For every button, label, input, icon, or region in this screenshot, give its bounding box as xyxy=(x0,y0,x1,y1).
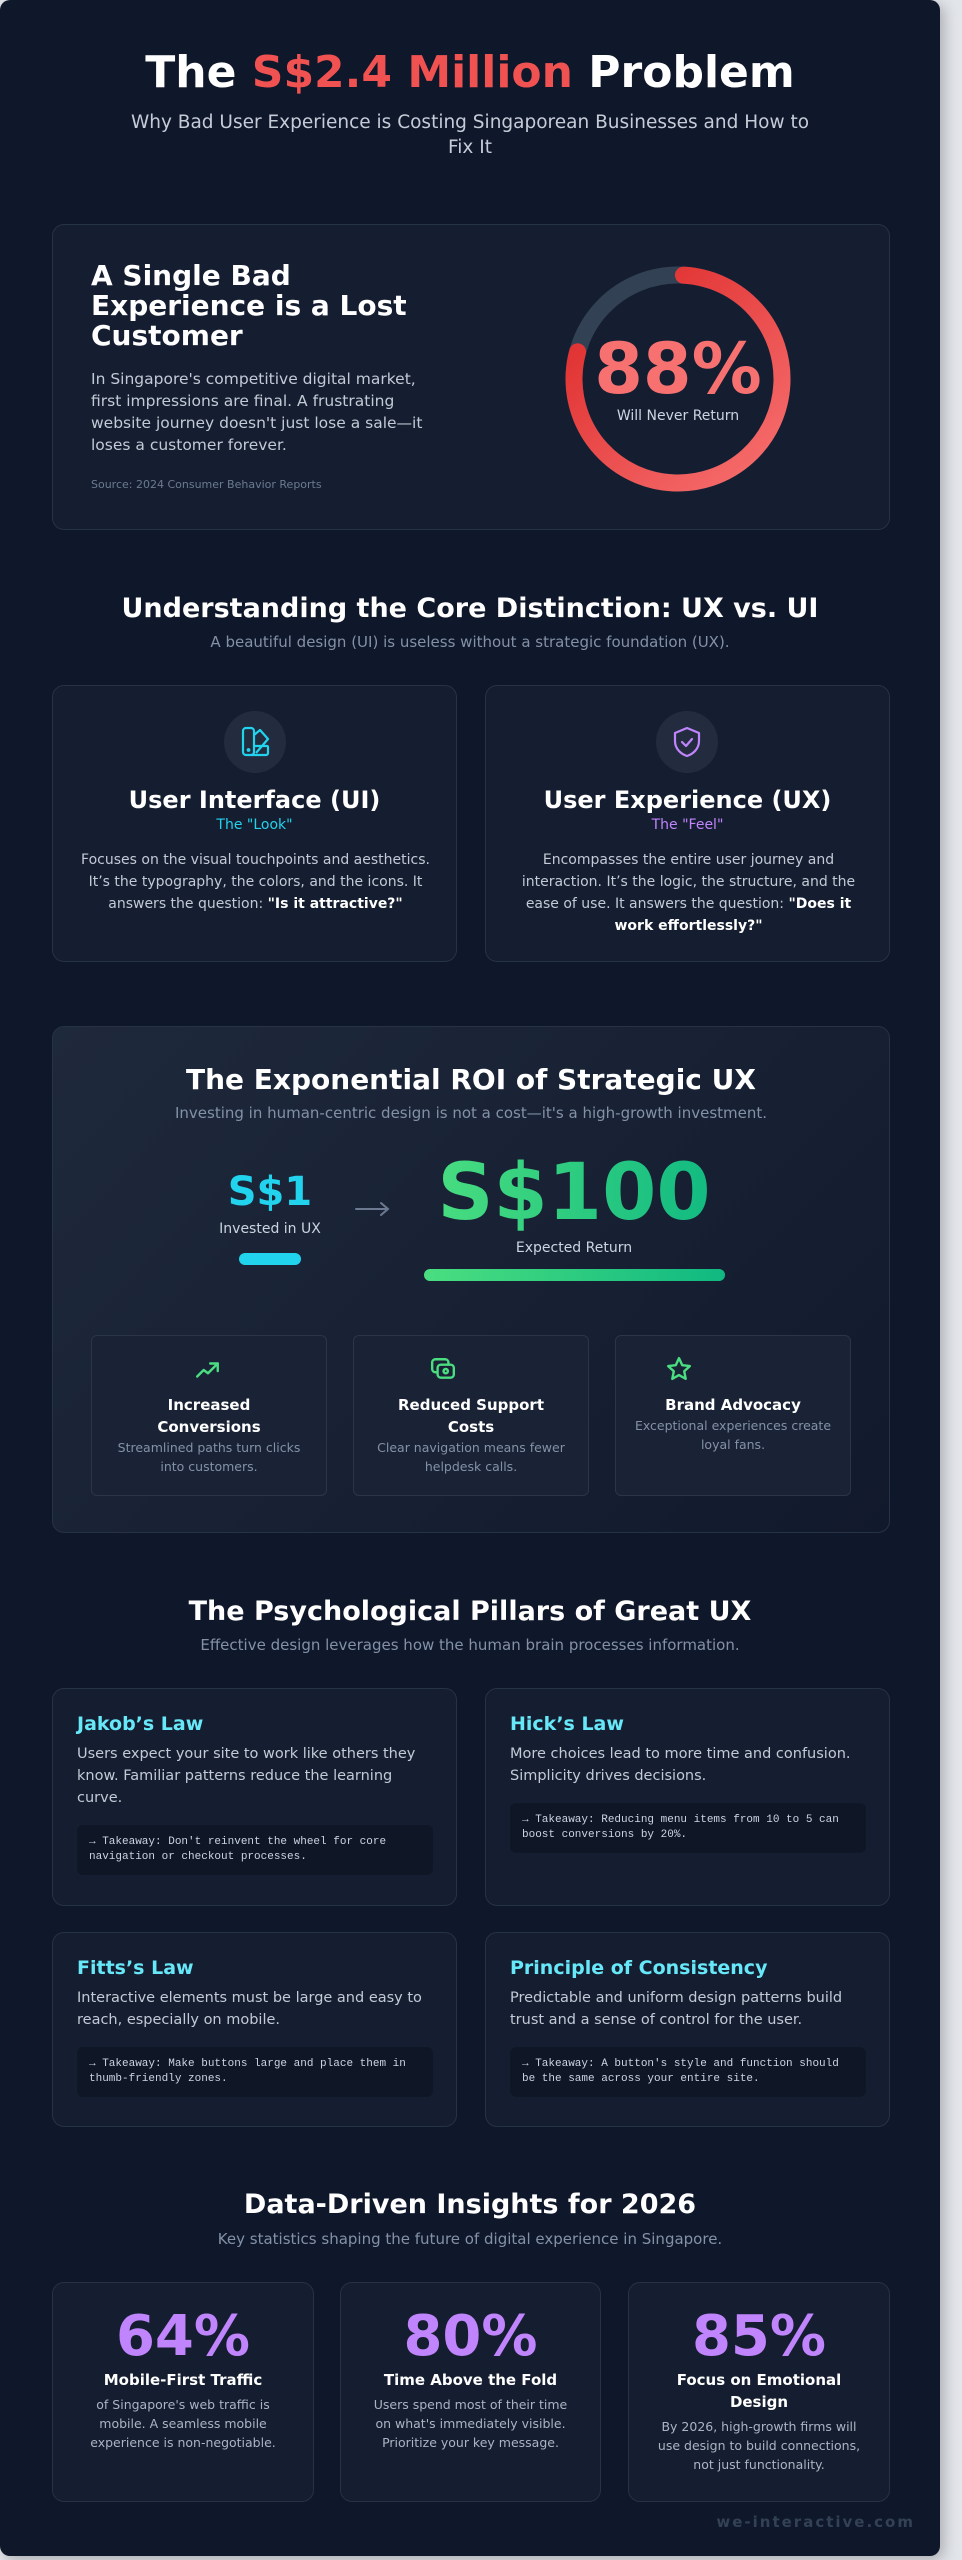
card: consistency: Predictable and uniform design patterns build trust and a sense of control for the user. xyxy=(510,1990,842,2028)
icon: trend xyxy=(196,1362,219,1378)
donut chart: 88% xyxy=(566,266,790,492)
subheading: A beautiful design (UI) is useless without a strategic foundation (UX). xyxy=(210,633,730,651)
paragraph: In Singapore's competitive digital market, first impressions are final. A frustrating website journey doesn't just lose a sale—it loses a customer forever. xyxy=(91,370,422,454)
subtitle: Why Bad User Experience is Costing Singaporean Businesses and How to Fix It xyxy=(131,112,809,158)
heading: data insights: Data-Driven Insights for 2026 xyxy=(244,2189,696,2220)
icon: shield xyxy=(656,711,718,773)
panel: lost customer xyxy=(52,224,890,530)
benefit: support: Reduced Support Costs xyxy=(398,1396,544,1436)
title: The S$2.4 Million Problem xyxy=(145,47,795,98)
heading: ROI: The Exponential ROI of Strategic UX xyxy=(186,1063,756,1096)
stat card: 64%: of Singapore's web traffic is mobile. A seamless mobile experience is non-negotiable. xyxy=(90,2397,276,2450)
stat: S$1: Invested in UX xyxy=(219,1221,321,1237)
takeaway: → Takeaway: Reducing menu items from 10 to 5 can boost conversions by 20%. xyxy=(522,1814,839,1841)
heading: single bad experience: A Single Bad Experience is a Lost Customer xyxy=(91,259,407,352)
takeaway: → Takeaway: Don't reinvent the wheel for core navigation or checkout processes. xyxy=(89,1836,386,1863)
benefit: support: Clear navigation means fewer helpdesk calls. xyxy=(377,1440,565,1474)
title: UX: User Experience (UX) xyxy=(544,786,831,814)
source: Source: 2024 Consumer Behavior Reports xyxy=(91,478,322,491)
body text: Focuses on the visual touchpoints and aesthetics. It’s the typography, the colors, and the icons. It answers the question: "Is it attractive?" xyxy=(81,852,430,912)
card: Jakob's law: Users expect your site to work like others they know. Familiar patterns reduce the learning curve. xyxy=(77,1746,415,1806)
benefit: advocacy: Brand Advocacy xyxy=(665,1396,801,1414)
donut chart: 88%: Will Never Return xyxy=(617,408,739,424)
stat card: 85% xyxy=(628,2282,890,2502)
stat: S$100: S$100 xyxy=(437,1148,711,1238)
card: Hick's law: More choices lead to more time and confusion. Simplicity drives decisions. xyxy=(510,1746,850,1784)
stat card: 80% xyxy=(340,2282,601,2502)
stat card: 80%: 80% xyxy=(403,2304,538,2369)
card: Fitts's law xyxy=(52,1932,457,2127)
takeaway xyxy=(510,2047,866,2097)
benefit: advocacy: Exceptional experiences create loyal fans. xyxy=(635,1418,831,1452)
card: Jakob's law: Jakob’s Law xyxy=(77,1713,203,1735)
benefit: advocacy xyxy=(615,1335,851,1496)
subheading: Key statistics shaping the future of digital experience in Singapore. xyxy=(218,2230,722,2248)
takeaway xyxy=(510,1803,866,1853)
heading: psychological pillars: The Psychological Pillars of Great UX xyxy=(189,1596,751,1627)
stat card: 85%: By 2026, high-growth firms will use design to build connections, not just functionality. xyxy=(658,2419,860,2472)
takeaway xyxy=(77,2047,433,2097)
stat card: 80%: Users spend most of their time on what's immediately visible. Prioritize your key message. xyxy=(374,2397,567,2450)
card: Fitts's law: Interactive elements must be large and easy to reach, especially on mobile. xyxy=(77,1990,422,2028)
benefit: conversions xyxy=(91,1335,327,1496)
benefit: support xyxy=(353,1335,589,1496)
stat: S$100: Expected Return xyxy=(516,1240,632,1256)
takeaway: → Takeaway: Make buttons large and place them in thumb-friendly zones. xyxy=(89,2058,406,2085)
tagline: The "Feel" xyxy=(652,817,723,833)
stat: S$100 xyxy=(424,1148,725,1281)
heading: UX vs UI: Understanding the Core Distinction: UX vs. UI xyxy=(122,593,818,624)
title: UI: User Interface (UI) xyxy=(129,786,380,814)
footer: brand: we-interactive.com xyxy=(716,2513,915,2531)
stat card: 80%: Time Above the Fold xyxy=(384,2371,557,2389)
icon: swatch xyxy=(224,711,286,773)
takeaway xyxy=(77,1825,433,1875)
card: consistency xyxy=(485,1932,890,2127)
stat: S$1: S$1 xyxy=(228,1169,312,1215)
subheading: Investing in human-centric design is not a cost—it's a high-growth investment. xyxy=(175,1104,767,1122)
card: Hick's law xyxy=(485,1688,890,1906)
card: Jakob's law xyxy=(52,1688,457,1906)
arrow xyxy=(355,1202,390,1216)
stat card: 64%: Mobile-First Traffic xyxy=(104,2371,262,2389)
icon: money xyxy=(430,1358,456,1379)
card: consistency: Principle of Consistency xyxy=(510,1957,767,1979)
stat card: 85%: 85% xyxy=(692,2304,826,2369)
subheading: Effective design leverages how the human brain processes information. xyxy=(200,1636,740,1654)
stat card: 64% xyxy=(52,2282,314,2502)
card: Fitts's law: Fitts’s Law xyxy=(77,1957,194,1979)
body text: Encompasses the entire user journey and interaction. It’s the logic, the structure, and the ease of use. It answers the question: "Does it work effortlessly?" xyxy=(522,852,855,934)
stat card: 85%: Focus on Emotional Design xyxy=(677,2371,841,2411)
takeaway: → Takeaway: A button's style and function should be the same across your entire site. xyxy=(522,2058,839,2085)
panel: ROI xyxy=(52,1026,890,1533)
benefit: conversions: Streamlined paths turn clicks into customers. xyxy=(118,1440,300,1474)
panel: UI xyxy=(52,685,457,962)
tagline: The "Look" xyxy=(216,817,293,833)
donut chart: 88%: 88% xyxy=(594,328,762,410)
card: Hick's law: Hick’s Law xyxy=(510,1713,624,1735)
benefit: conversions: Increased Conversions xyxy=(157,1396,261,1436)
icon: star xyxy=(666,1356,691,1380)
panel: UX xyxy=(485,685,890,962)
stat: S$1 xyxy=(219,1169,321,1265)
stat card: 64%: 64% xyxy=(116,2304,250,2369)
